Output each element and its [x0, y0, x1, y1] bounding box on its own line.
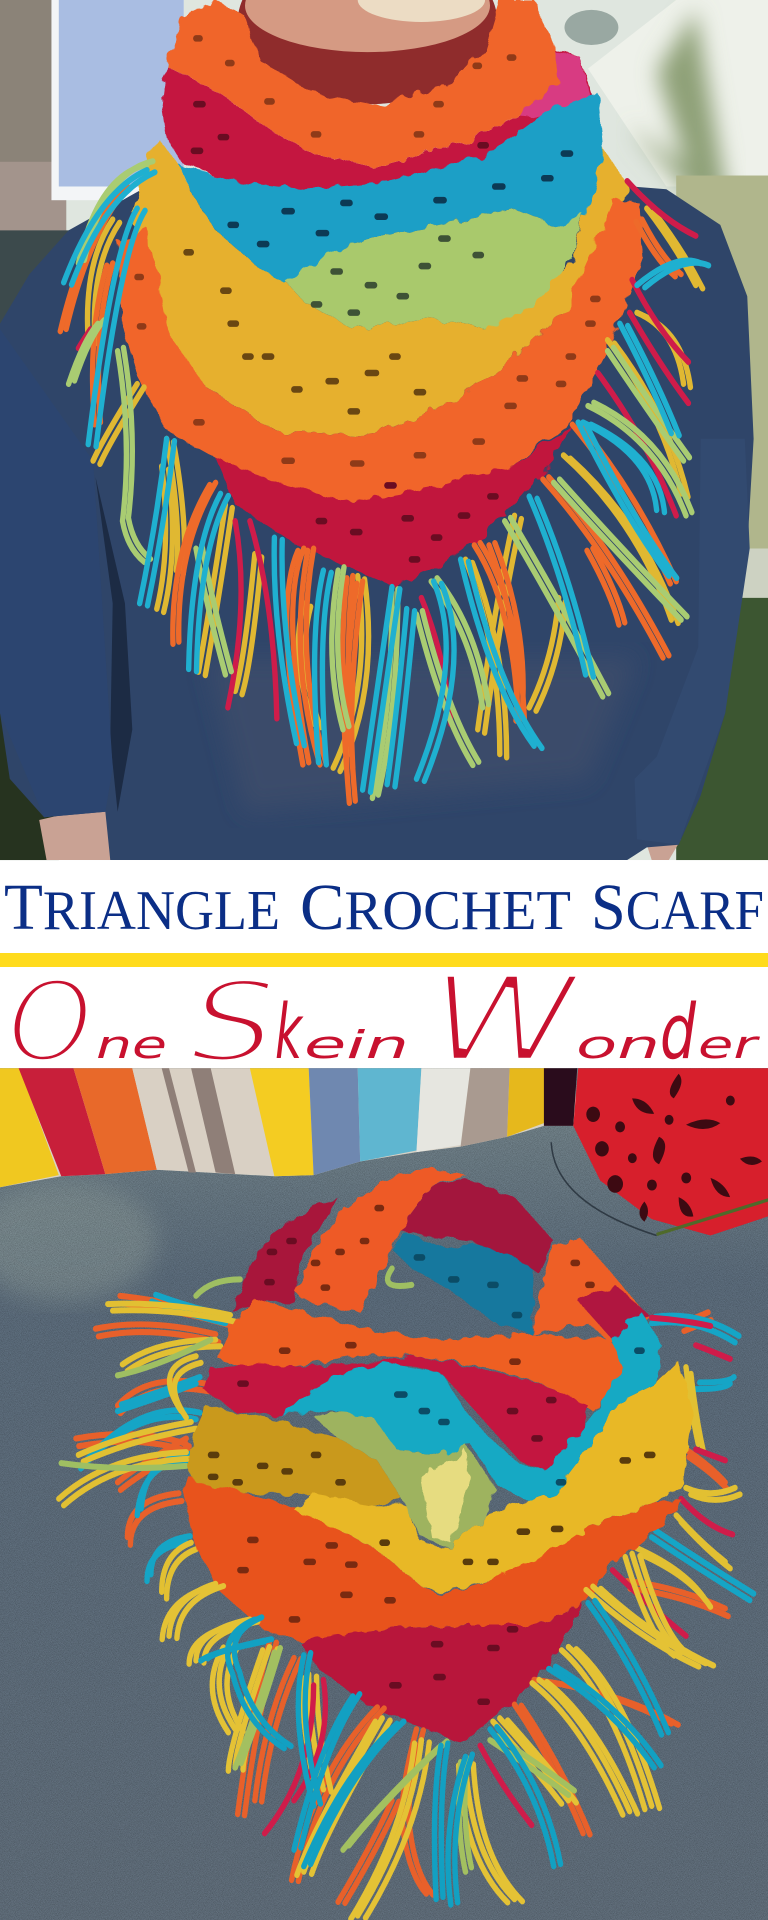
subtitle: One Skein Wonder: ein: [304, 1023, 409, 1067]
subtitle: One Skein Wonder: [7, 951, 761, 1090]
subtitle: One Skein Wonder: er: [698, 1023, 761, 1067]
red perforated basket: [551, 1068, 768, 1236]
photo background: house, sky, trees and grass: [0, 0, 768, 860]
title: Triangle Crochet Scarf: TRIANGLE: [4, 871, 280, 944]
yellow divider bar: [0, 953, 768, 967]
fringe: green strands: [69, 161, 692, 798]
fringe: yellow strands: [88, 208, 703, 771]
subtitle: One Skein Wonder: on: [576, 1023, 660, 1067]
fringe under the scarf: orange, teal, yellow, green, red: [59, 1268, 754, 1636]
subtitle: One Skein Wonder: ne: [96, 1023, 167, 1067]
front fringe: orange strands: [238, 1641, 678, 1903]
crochet stitch holes: [211, 1208, 653, 1702]
subtitle: One Skein Wonder: d: [660, 988, 697, 1077]
front fringe: red strands: [265, 1680, 532, 1833]
subtitle: One Skein Wonder: W: [429, 951, 582, 1090]
title: Triangle Crochet Scarf: CROCHET: [300, 871, 571, 944]
photo: scarf laid flat on concrete: [0, 1060, 768, 1920]
scarf bands on the ground: [184, 1167, 693, 1743]
navy sweater: [0, 176, 754, 860]
neck skin: [238, 0, 497, 104]
photo: scarf worn around the neck: [0, 0, 768, 860]
title: Triangle Crochet Scarf: [4, 871, 764, 944]
striped pillow: [0, 1068, 577, 1187]
front fringe: yellow strands: [162, 1554, 713, 1919]
subtitle: One Skein Wonder: S: [189, 958, 277, 1088]
fringe: red strands: [78, 181, 696, 724]
front fringe: teal strands: [201, 1601, 668, 1905]
hand and wrist skin: [39, 812, 681, 860]
crochet scarf bands: [118, 0, 643, 586]
subtitle: One Skein Wonder: k: [275, 988, 304, 1077]
front fringe: green strands: [235, 1648, 574, 1872]
crochet stitch holes: [137, 38, 598, 559]
subtitle: One Skein Wonder: O: [7, 958, 93, 1088]
fringe: orange strands: [60, 186, 681, 803]
title: Triangle Crochet Scarf: SCARF: [591, 871, 764, 944]
fringe: teal strands: [64, 170, 709, 792]
concrete ground: [0, 1060, 768, 1920]
